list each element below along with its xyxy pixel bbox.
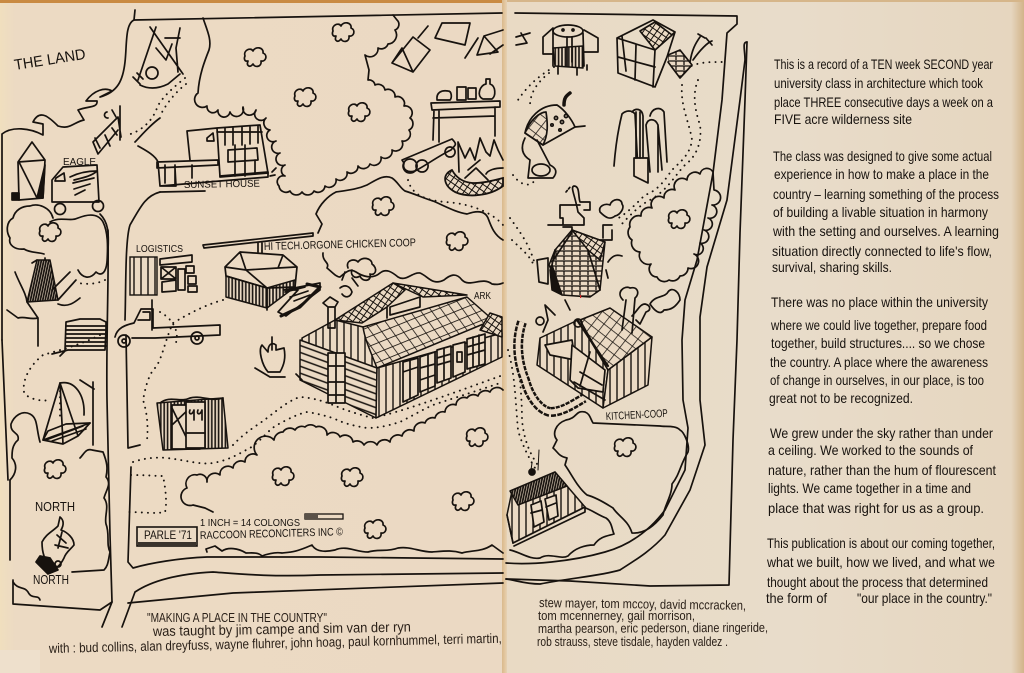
ark: siding wall (300, 340, 377, 418)
map labels (13, 46, 491, 587)
tipi (133, 27, 183, 88)
paragraph 2: experience in how to make a place in the (774, 166, 989, 182)
paragraph 4: a ceiling. We worked to the sounds of (768, 442, 973, 458)
course credits: right page (537, 595, 768, 649)
text column (766, 56, 999, 606)
forest: kitchen wood (553, 412, 688, 533)
forest: small trees east (614, 210, 690, 456)
map labels: EAGLE (63, 157, 96, 168)
forest: tree-house grove (7, 205, 108, 277)
forest: edge behind the ark (323, 253, 503, 284)
smoke cloud (340, 258, 376, 297)
paragraph 3: the country. A place where the awareness (770, 354, 988, 370)
stacked logs (52, 319, 106, 356)
course credits: right page: tom mcennerney, gail morrison, (538, 608, 695, 623)
swing hammock (43, 380, 94, 445)
map labels: HI TECH.ORGONE CHICKEN COOP (264, 237, 416, 253)
greenhouse (617, 20, 712, 87)
paragraph 4: place that was right for us as a group. (768, 500, 984, 516)
course credits: left page (48, 611, 502, 656)
parle 71 sign: PARLE '71 (144, 528, 192, 542)
trees beside kitchen (536, 287, 680, 333)
kitchen coop: side wall (537, 320, 608, 408)
small shed (507, 450, 585, 546)
paragraph 5: the form of (766, 590, 827, 606)
forest: south wood (181, 388, 503, 512)
forest: large north wood (195, 15, 413, 195)
map labels: SUNSET HOUSE (184, 179, 260, 191)
footpaths east (508, 62, 722, 468)
ark: main roof (363, 297, 493, 368)
paragraph 1: FIVE acre wilderness site (774, 111, 912, 127)
paragraph 3: together, build structures.... so we chose (771, 335, 985, 351)
course credits: left page: with : bud collins, alan dreyfuss, wayne fluhrer, john hoag, paul kornhummel, terri martin, (48, 631, 502, 656)
map labels: NORTH (35, 499, 75, 514)
footpaths (24, 78, 503, 513)
paragraph 3 (769, 294, 988, 406)
course credits: right page: rob strauss, steve tisdale, hayden valdez . (537, 634, 728, 649)
paragraph 4: lights. We came together in a time and (768, 480, 971, 496)
paragraph 3: great not to be recognized. (769, 390, 913, 406)
forest: southwest grove (10, 413, 110, 600)
logistics (130, 255, 197, 295)
paragraph 4 (768, 425, 996, 516)
tents (392, 23, 503, 72)
paragraph 2: survival, sharing skills. (772, 259, 892, 275)
paragraph 2 (772, 148, 999, 275)
water tap (548, 186, 623, 238)
course credits: right page: stew mayer, tom mccoy, david mccracken, (539, 595, 746, 613)
forest: small trees (39, 23, 488, 538)
kitchen coop: end wall (603, 337, 652, 408)
map labels: THE LAND (13, 46, 87, 74)
bucket (255, 337, 302, 380)
kitchen-coop label: KITCHEN-COOP (606, 408, 668, 423)
octagonal hut (537, 230, 622, 298)
scale and credit: RACCOON RECONCITERS INC © (200, 526, 343, 542)
truck (115, 300, 220, 347)
forest: east wood (628, 168, 721, 282)
parle 71 sign (137, 527, 197, 546)
paragraph 4: We grew under the sky rather than under (770, 425, 993, 441)
forest: south wood hedge (206, 545, 503, 556)
paragraph 2: with the setting and ourselves. A learning (772, 223, 999, 239)
shed (157, 397, 228, 450)
north hand icon (36, 517, 74, 574)
map labels: NORTH (33, 572, 69, 587)
stepping stones path (518, 322, 584, 412)
roundhouse (543, 25, 598, 75)
course credits: left page: "MAKING A PLACE IN THE COUNTRY" (147, 611, 327, 625)
paragraph 3: of change in ourselves, in our place, is too (770, 372, 984, 388)
map labels: ARK (474, 291, 491, 302)
ark: windows (403, 334, 485, 402)
forest: marsh by shed (510, 507, 614, 558)
scale and credit: 1 INCH = 14 COLONGS (200, 518, 300, 529)
dome oven (522, 93, 585, 178)
paragraph 1 (774, 56, 993, 127)
kitchen coop building (537, 308, 652, 408)
paragraph 4: nature, rather than the hum of flourescent (768, 462, 996, 478)
chicken coop with propeller (203, 233, 320, 316)
paragraph 5: what we built, how we lived, and what we (766, 554, 995, 570)
sunset house (157, 125, 276, 186)
paragraph 2: of building a livable situation in harmony (773, 204, 988, 220)
eagle van (52, 165, 104, 214)
forest: central wood (316, 177, 503, 240)
course credits: right page: martha pearson, eric pederson, diane ringeride, (538, 620, 768, 636)
treehouse and tree (7, 258, 80, 346)
upright panels (614, 109, 667, 183)
gate (93, 106, 121, 154)
eagle silo (12, 142, 45, 200)
property and road outlines (2, 10, 503, 627)
ark: front wall (376, 333, 502, 418)
kitchen coop: roof (580, 308, 652, 370)
table with pots (431, 79, 500, 142)
paragraph 1: university class in architecture which took (774, 75, 984, 91)
ark: back roof (335, 283, 405, 323)
scale and credit (200, 514, 343, 542)
paragraph 5: thought about the process that determined (767, 574, 988, 590)
paragraph 3: There was no place within the university (771, 294, 988, 310)
paragraph 5 (766, 535, 995, 606)
map labels: LOGISTICS (136, 244, 183, 255)
paragraph 2: situation directly connected to life's flow, (772, 243, 992, 259)
paragraph 5: "our place in the country." (857, 590, 992, 606)
frame and road (506, 13, 747, 586)
ark building (300, 283, 502, 418)
panel: map of the land (2, 10, 503, 627)
ark: end gable (302, 320, 377, 375)
log and campfire (402, 138, 503, 195)
panel: right page of map (506, 13, 747, 586)
course credits: left page: was taught by jim campe and sim van der ryn (152, 618, 411, 639)
